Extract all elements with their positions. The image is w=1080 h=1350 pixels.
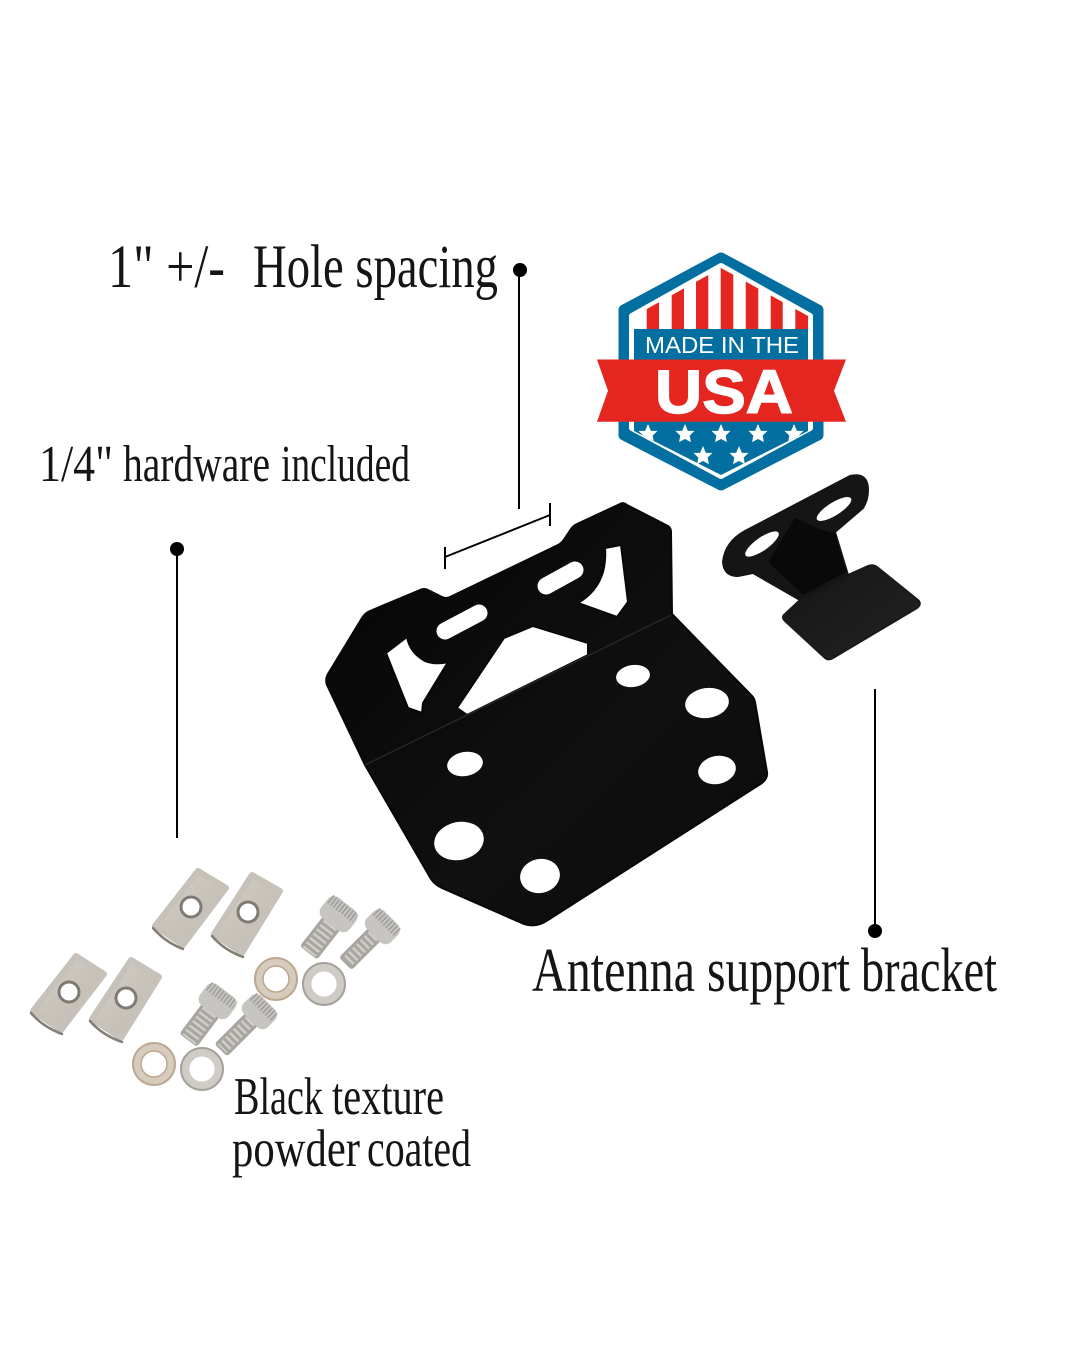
label: black texture powder coated: texture — [332, 1068, 444, 1126]
label: hole spacing — [108, 234, 498, 301]
T-nut lower edges — [31, 928, 243, 1042]
red ribbon — [597, 360, 846, 422]
bolt top right — [333, 906, 403, 976]
label: hardware included: 1/4" — [39, 436, 113, 493]
small bracket slots — [742, 493, 854, 561]
slots — [445, 570, 575, 631]
label: hardware included: hardware — [123, 436, 270, 493]
badge: made in the USA — [597, 258, 846, 485]
bolt top left — [294, 893, 361, 964]
main L bracket — [326, 503, 767, 925]
blue band — [634, 329, 808, 361]
label: black texture powder coated: coated — [367, 1120, 471, 1178]
stars — [638, 424, 804, 464]
bolt lower right — [209, 991, 280, 1062]
washers — [133, 958, 345, 1090]
label: black texture powder coated: powder — [232, 1120, 360, 1178]
small bracket flange — [723, 475, 868, 600]
leader: antenna support bracket — [868, 689, 882, 938]
leader: hardware — [170, 542, 184, 838]
fold line — [365, 615, 671, 765]
label: hardware included — [39, 436, 410, 493]
small antenna support bracket — [723, 475, 920, 659]
label: hardware included: included — [281, 436, 410, 493]
T-nuts — [33, 871, 280, 1038]
label: antenna support bracket: bracket — [861, 937, 997, 1005]
label: antenna support bracket — [532, 937, 997, 1005]
T-nut holes — [59, 897, 258, 1008]
shaded web — [768, 518, 846, 595]
label: hole spacing: 1" +/- — [108, 234, 225, 301]
label: black texture powder coated: Black — [234, 1068, 323, 1126]
badge hexagon — [624, 258, 818, 485]
label: hole spacing: Hole spacing — [253, 234, 498, 301]
flag stripes — [646, 268, 808, 329]
mounting holes — [431, 663, 738, 897]
label: antenna support bracket: support — [707, 937, 850, 1005]
badge text: made in the: MADE IN THE — [645, 332, 799, 358]
dimension marker: hole spacing — [445, 503, 550, 569]
badge text: USA: USA — [655, 358, 793, 426]
label: black texture powder coated — [232, 1068, 471, 1178]
bolt lower left — [174, 980, 240, 1051]
blue lower field — [634, 420, 808, 475]
leader: hole spacing — [513, 263, 527, 509]
small bracket tab — [783, 565, 920, 659]
bracket body with cut-outs — [326, 503, 767, 925]
hardware kit — [31, 871, 403, 1090]
label: antenna support bracket: Antenna — [532, 937, 695, 1005]
